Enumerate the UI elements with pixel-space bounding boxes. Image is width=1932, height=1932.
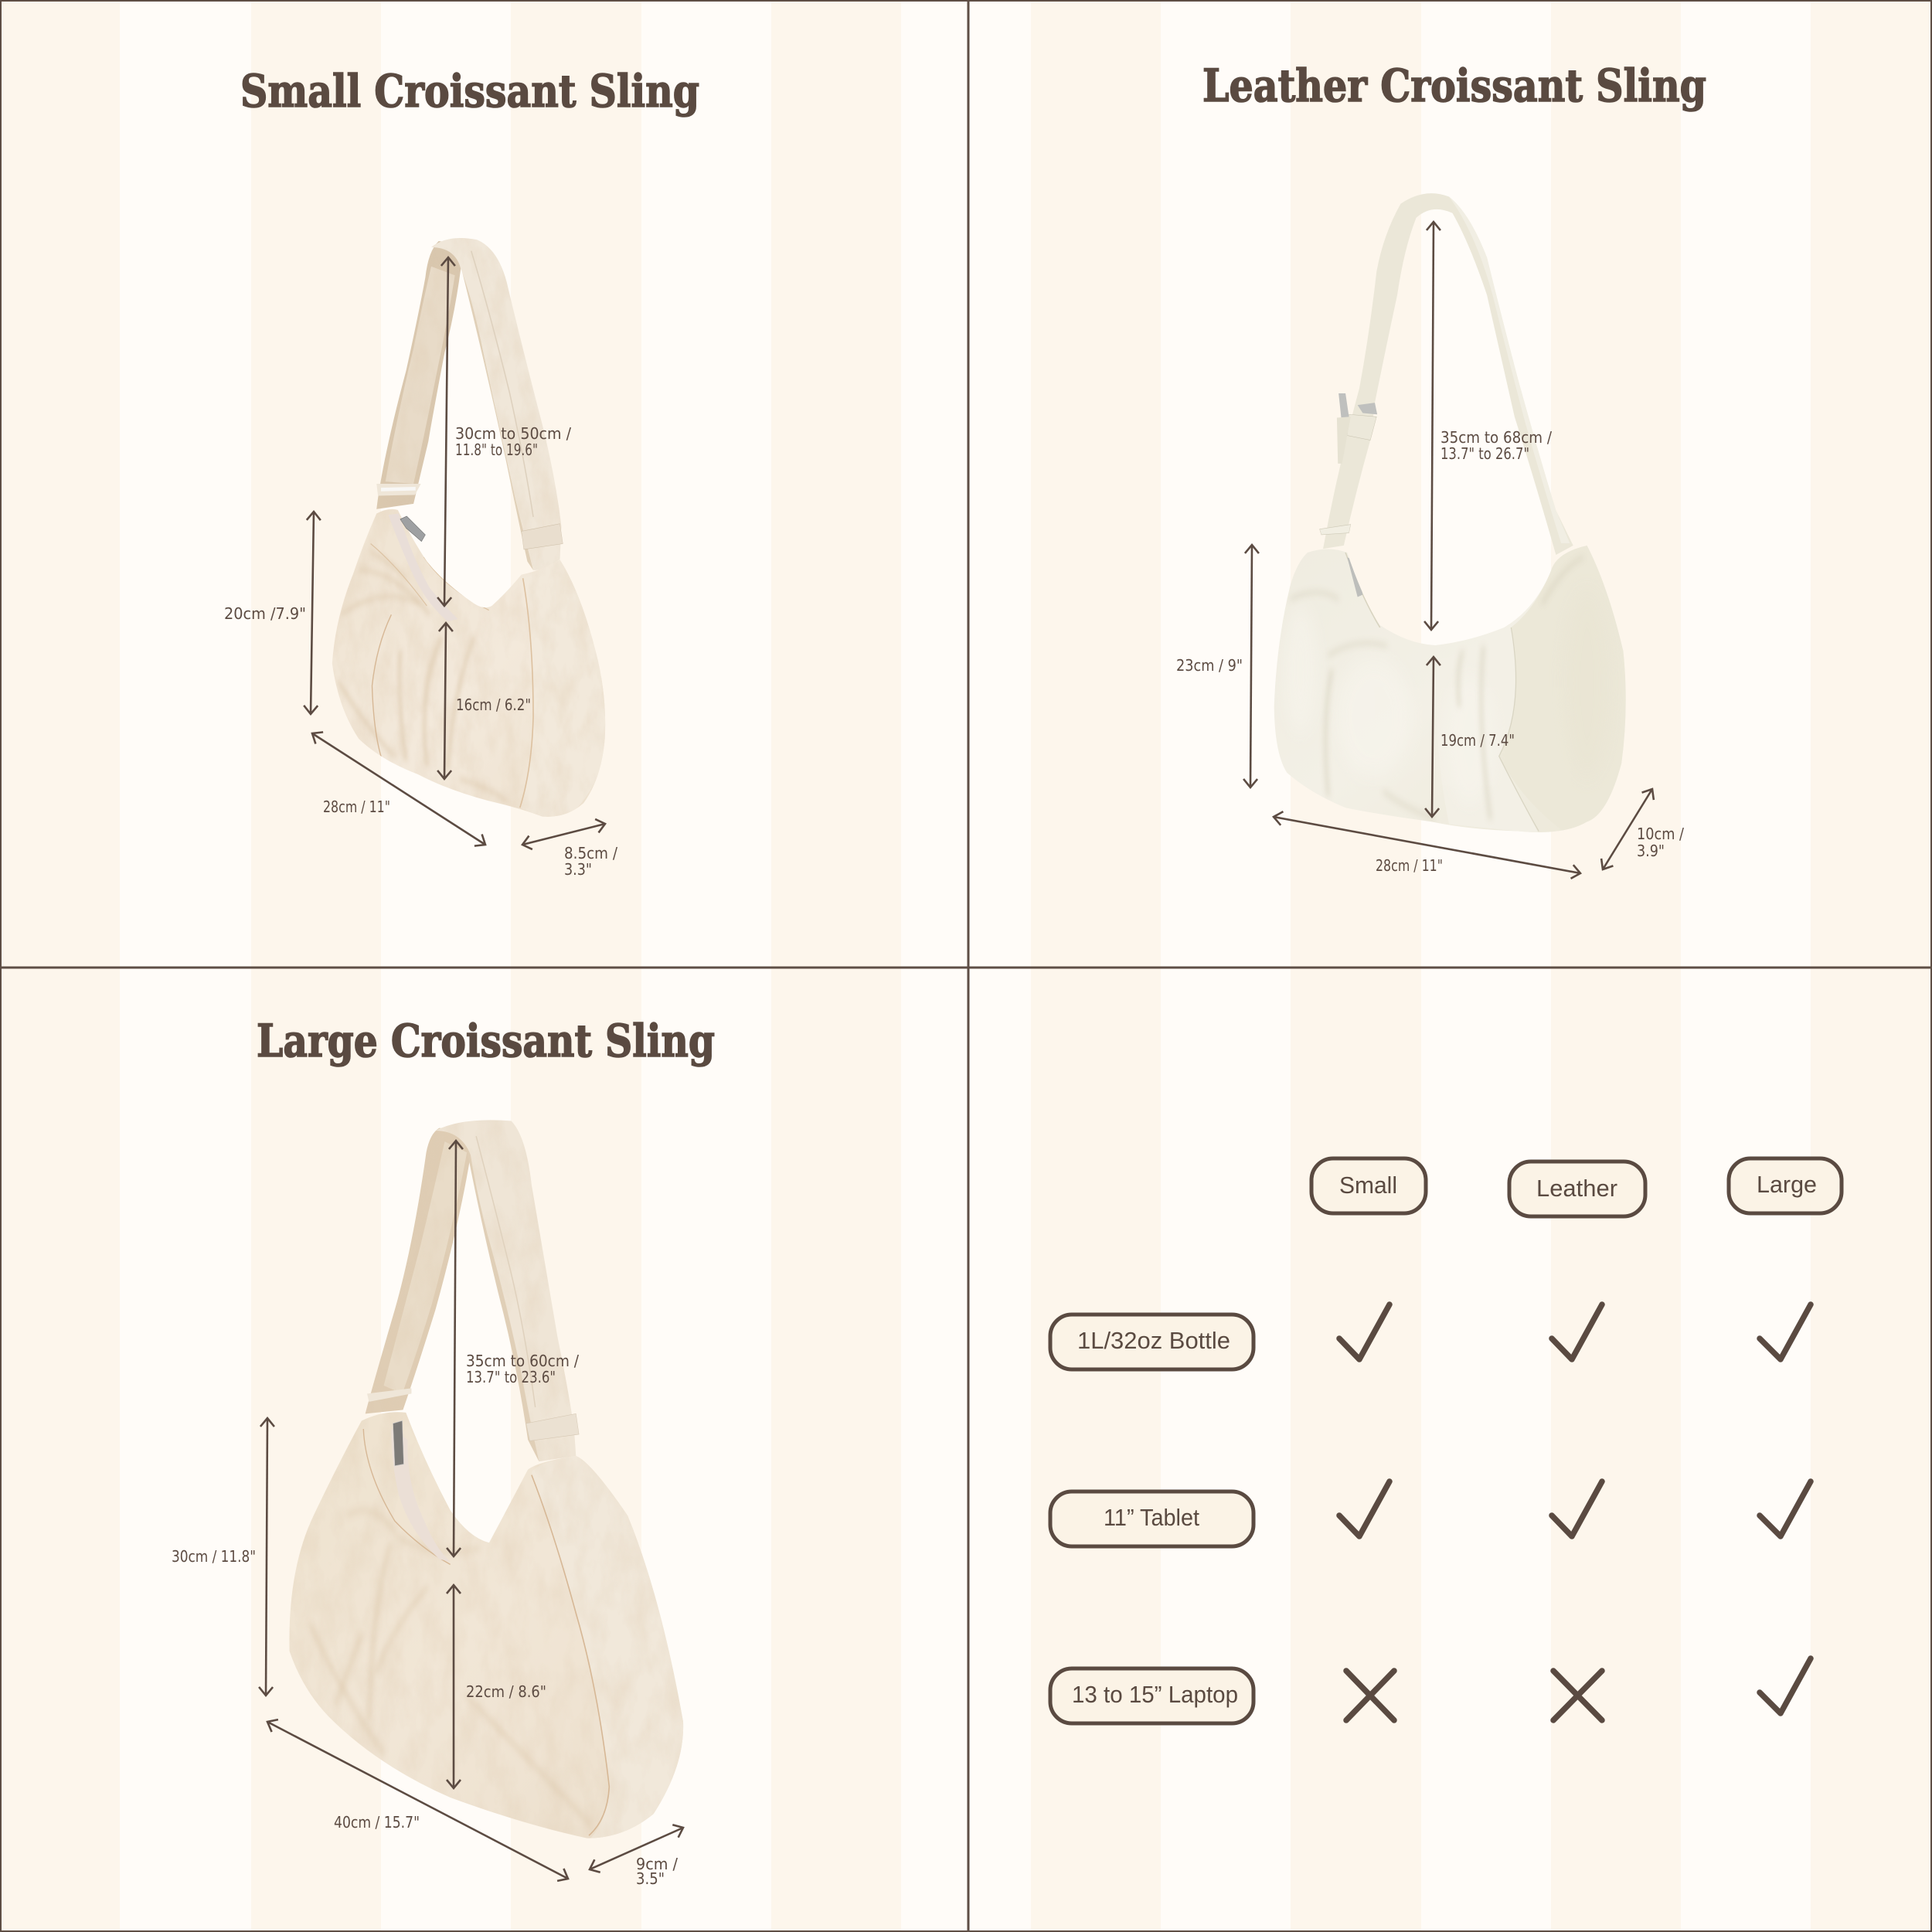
column header: small: Small xyxy=(1339,1172,1397,1199)
row header: tablet: 11” Tablet xyxy=(1104,1504,1199,1531)
label: depth: 10cm / xyxy=(1637,825,1684,843)
label: depth: 3.3" xyxy=(564,860,592,879)
column header: leather: Leather xyxy=(1536,1175,1617,1202)
arrow: width xyxy=(1274,817,1580,873)
column header: large: Large xyxy=(1757,1171,1817,1198)
label: inner height: 19cm / 7.4" xyxy=(1440,731,1515,750)
arrow: strap drop xyxy=(1431,222,1434,630)
icon: check bottle small xyxy=(1339,1304,1389,1359)
icon: check tablet leather xyxy=(1552,1481,1602,1536)
label: inner height: 22cm / 8.6" xyxy=(466,1682,546,1701)
label: width: 28cm / 11" xyxy=(1376,856,1443,875)
label: depth xyxy=(636,1855,678,1888)
row header: laptop xyxy=(1050,1668,1253,1723)
panel: compatibility table xyxy=(1050,1158,1842,1723)
label: depth: 8.5cm / xyxy=(564,844,617,862)
arrow: total height xyxy=(311,512,314,714)
label: strap drop: 35cm to 68cm / xyxy=(1440,428,1552,447)
label: strap drop xyxy=(455,424,571,459)
label: total height: 30cm / 11.8" xyxy=(172,1547,256,1566)
label: strap drop xyxy=(1440,428,1552,463)
label: total height: 23cm / 9" xyxy=(1176,656,1243,675)
arrow: total height xyxy=(266,1418,267,1696)
icon: check bottle leather xyxy=(1552,1304,1602,1359)
bag photo: leather sling xyxy=(1274,193,1626,834)
arrow: depth xyxy=(522,824,605,845)
arrow: strap drop xyxy=(444,257,448,606)
row header: laptop: 13 to 15” Laptop xyxy=(1072,1681,1238,1708)
row header: bottle xyxy=(1050,1315,1253,1369)
arrow: depth xyxy=(590,1828,683,1869)
title: large croissant sling: Large Croissant Sling xyxy=(257,1015,715,1067)
arrow: width xyxy=(312,733,485,845)
label: depth xyxy=(1637,825,1684,860)
label: inner height: 16cm / 6.2" xyxy=(456,696,531,714)
label: depth xyxy=(564,844,617,879)
label: depth: 3.9" xyxy=(1637,842,1665,860)
title: leather croissant sling: Leather Croissant Sling xyxy=(1202,60,1706,112)
label: total height: 20cm /7.9" xyxy=(224,604,306,623)
icon: check tablet large xyxy=(1760,1481,1811,1536)
label: width: 28cm / 11" xyxy=(323,798,390,816)
arrow: depth xyxy=(1603,789,1652,869)
row header: tablet xyxy=(1050,1492,1253,1546)
arrow: total height xyxy=(1250,545,1252,787)
icon: check bottle large xyxy=(1760,1304,1811,1359)
label: strap drop: 35cm to 60cm / xyxy=(466,1352,579,1370)
icon: cross laptop leather xyxy=(1553,1671,1602,1720)
arrow: inner height xyxy=(453,1585,454,1788)
label: depth: 3.5" xyxy=(636,1869,665,1888)
bag photo: small sling xyxy=(326,233,611,823)
label: strap drop: 11.8" to 19.6" xyxy=(455,440,538,459)
column header: small xyxy=(1311,1158,1426,1213)
icon: cross laptop small xyxy=(1346,1671,1394,1720)
column header: leather xyxy=(1509,1162,1645,1216)
label: strap drop: 13.7" to 23.6" xyxy=(466,1368,556,1386)
panel: small croissant sling xyxy=(224,65,699,879)
label: strap drop xyxy=(466,1352,579,1386)
icon: check tablet small xyxy=(1339,1481,1389,1536)
arrow: width xyxy=(267,1722,568,1879)
bag photo: large sling xyxy=(284,1109,687,1841)
column header: large xyxy=(1729,1158,1842,1213)
arrow: strap drop xyxy=(454,1141,456,1556)
icon: check laptop large xyxy=(1760,1658,1811,1713)
row header: bottle: 1L/32oz Bottle xyxy=(1077,1327,1230,1354)
label: width: 40cm / 15.7" xyxy=(334,1813,420,1832)
label: depth: 9cm / xyxy=(636,1855,678,1873)
arrow: inner height xyxy=(1432,657,1434,817)
label: strap drop: 30cm to 50cm / xyxy=(455,424,571,443)
label: strap drop: 13.7" to 26.7" xyxy=(1440,444,1529,463)
panel: large croissant sling xyxy=(172,1015,715,1888)
panel: leather croissant sling xyxy=(1176,60,1706,875)
title: small croissant sling: Small Croissant Sling xyxy=(240,65,699,117)
arrow: inner height xyxy=(444,623,446,779)
